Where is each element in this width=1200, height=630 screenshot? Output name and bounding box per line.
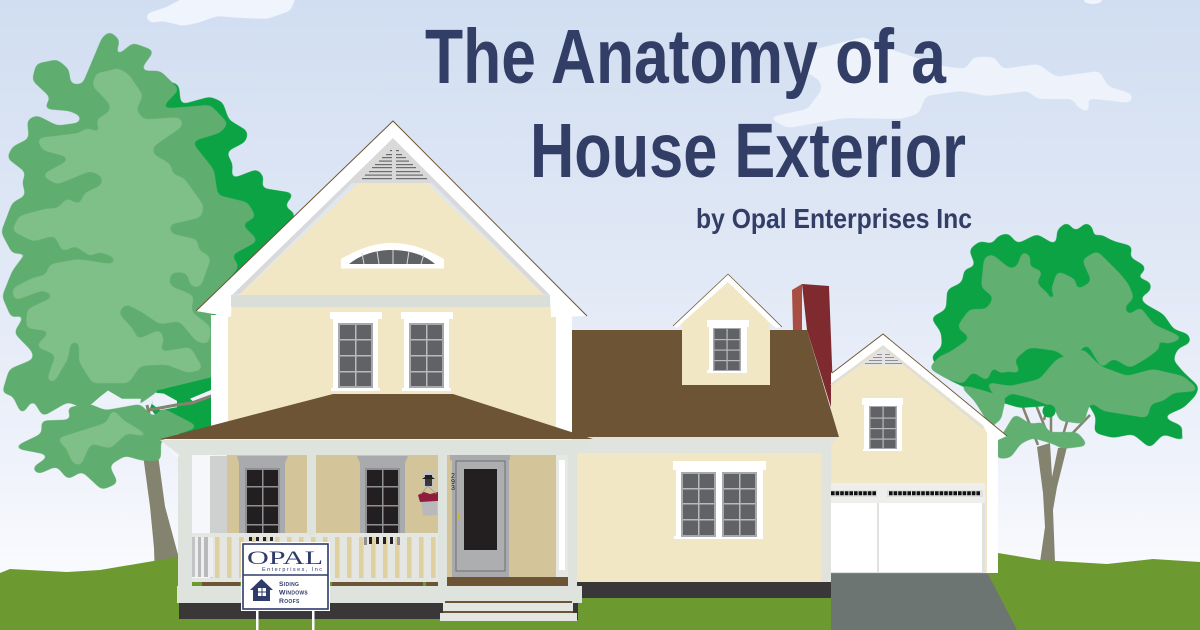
side wing	[572, 273, 839, 598]
step foundation	[573, 603, 578, 620]
wing window	[673, 461, 766, 539]
light green foliage	[13, 69, 210, 382]
right tree	[930, 223, 1198, 562]
dark green dot	[1042, 404, 1056, 418]
porch floor right	[426, 582, 438, 587]
porch side wall	[210, 456, 227, 580]
porch deck	[177, 586, 582, 603]
porch floor mid	[332, 582, 423, 587]
driveway	[831, 574, 1017, 630]
porch	[160, 394, 593, 621]
gable inner band	[232, 138, 550, 295]
bottom rail	[192, 578, 438, 582]
white corner columns	[211, 315, 228, 435]
roof edge line	[196, 121, 587, 316]
garage door vents	[831, 490, 983, 497]
dormer	[673, 273, 782, 385]
garage doors	[831, 483, 987, 573]
lower mid foliage	[15, 405, 197, 489]
title: House Exterior	[530, 108, 966, 194]
title	[425, 14, 966, 194]
trunk	[1037, 443, 1067, 562]
branches	[1022, 400, 1090, 445]
house number: 9	[451, 479, 455, 486]
dormer window	[707, 320, 749, 373]
cloud: top left	[146, 0, 296, 25]
right porch panel	[556, 455, 568, 580]
gable vent	[355, 140, 433, 183]
title: The Anatomy of a	[425, 14, 947, 100]
dark green foliage	[932, 223, 1198, 447]
garage vent	[862, 348, 903, 365]
garage gable window	[862, 398, 903, 451]
mid green foliage	[2, 32, 257, 415]
porch wall	[227, 455, 556, 580]
left lower foliage	[960, 385, 1087, 458]
left tree	[2, 32, 295, 579]
porch roof	[160, 394, 593, 439]
upper mid foliage	[930, 252, 1182, 383]
chimney	[792, 284, 834, 417]
cloud: top right	[1084, 0, 1102, 4]
house number: 3	[451, 485, 455, 492]
wing roof	[572, 330, 839, 437]
trunk	[143, 455, 185, 579]
branches	[147, 396, 212, 418]
sign services text: Roofs	[279, 598, 300, 605]
grass hills	[0, 553, 1200, 630]
wall lantern	[422, 472, 435, 487]
gable fill	[238, 150, 545, 296]
main wall	[228, 305, 556, 430]
door threshold	[447, 577, 568, 586]
sky gap right	[190, 389, 212, 403]
porch columns	[178, 455, 577, 603]
sign services text: Windows	[279, 590, 308, 596]
trim band	[231, 295, 550, 307]
garage wing	[831, 334, 1007, 573]
sign logo text: OPAL	[247, 548, 323, 569]
main house upper	[196, 121, 587, 435]
garage fascia	[831, 334, 1007, 573]
right column	[556, 315, 572, 435]
cloud: center	[770, 38, 1132, 127]
house number: 2	[451, 473, 455, 480]
railing balusters	[213, 537, 438, 578]
gable fascia	[196, 121, 587, 317]
subtitle: by Opal Enterprises Inc	[696, 203, 972, 234]
wing beam	[572, 437, 838, 582]
lower mid foliage	[987, 350, 1198, 423]
sign board	[241, 542, 330, 611]
top rail	[192, 533, 438, 537]
sign services text	[279, 581, 308, 605]
house number	[451, 473, 455, 492]
wing wall	[576, 453, 821, 582]
window reflections through railing	[249, 537, 400, 545]
porch floor left	[202, 582, 240, 587]
yard sign	[241, 542, 330, 630]
garage roof edge line	[832, 334, 1007, 436]
arched window	[341, 243, 444, 268]
lower light foliage	[58, 410, 150, 465]
right porch opening	[559, 460, 565, 570]
porch open area	[192, 455, 213, 580]
front steps	[440, 601, 577, 621]
sign posts	[256, 610, 314, 630]
garage inner band	[831, 347, 983, 428]
garage wall	[831, 340, 987, 490]
sign frame	[243, 544, 328, 609]
porch window right	[357, 456, 408, 535]
wing foundation	[577, 582, 831, 598]
sign subtitle: Enterprises, Inc	[262, 567, 322, 573]
sky gap left	[88, 391, 141, 411]
porch beam	[160, 440, 592, 455]
upper right window	[401, 312, 453, 391]
icon: house	[250, 579, 273, 601]
left railing	[192, 537, 213, 577]
foundation	[179, 603, 443, 619]
hanging flower planter	[418, 486, 438, 516]
sign services text: Siding	[279, 581, 299, 588]
upper left window	[330, 312, 382, 391]
dark green foliage	[130, 82, 295, 434]
door	[450, 455, 510, 577]
porch window left	[237, 456, 288, 535]
garage header	[831, 483, 986, 503]
porch gutter	[170, 448, 179, 456]
sky gap center	[152, 393, 177, 410]
dark green under branches	[150, 377, 212, 434]
